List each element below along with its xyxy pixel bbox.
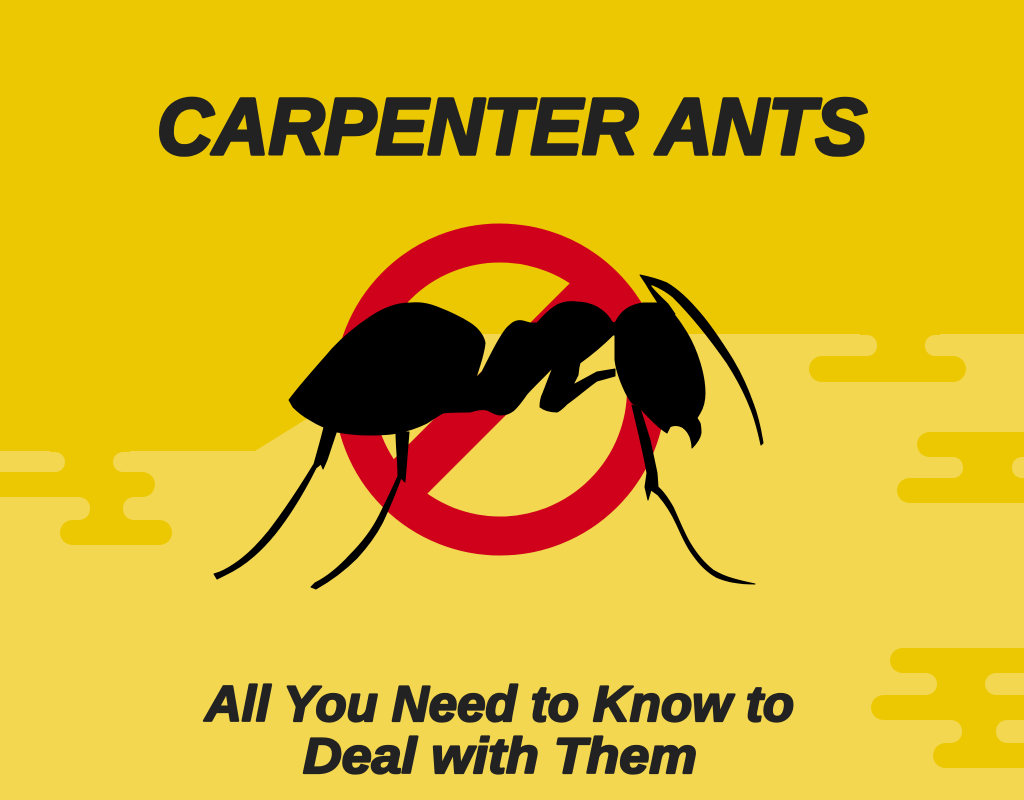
cloud: lower right <box>870 648 1024 768</box>
middle leg <box>311 432 409 589</box>
cloud: middle right <box>897 432 1024 503</box>
antenna <box>640 275 763 445</box>
ant body <box>289 302 705 448</box>
front leg <box>632 405 755 584</box>
cloud: left <box>0 451 213 545</box>
background: light yellow area <box>0 334 1024 800</box>
back leg <box>214 423 337 579</box>
cloud: upper right <box>780 333 1024 382</box>
icon: ant silhouette <box>214 275 763 589</box>
subtitle: All You Need to Know to <box>203 676 794 732</box>
subtitle <box>203 676 794 784</box>
icon: prohibition sign <box>354 243 646 536</box>
title: CARPENTER ANTS <box>157 82 867 171</box>
subtitle: Deal with Them <box>303 728 697 784</box>
